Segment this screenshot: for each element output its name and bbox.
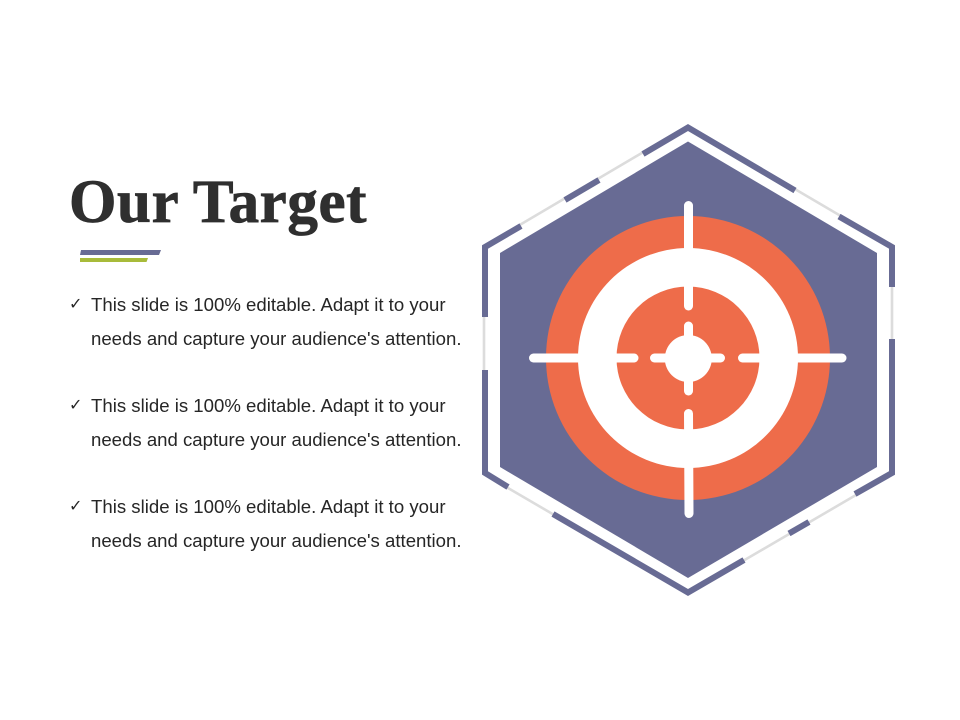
bullet one: needs and capture your audience's attention. bbox=[91, 328, 462, 349]
bullet two bbox=[69, 395, 462, 450]
hexagon fill bbox=[500, 142, 877, 578]
title: Our Target bbox=[69, 169, 367, 236]
bullet one: ✓ bbox=[69, 294, 82, 313]
bullet three: ✓ bbox=[69, 496, 82, 515]
bullet two: ✓ bbox=[69, 395, 82, 414]
bullet three: This slide is 100% editable. Adapt it to your bbox=[91, 496, 446, 517]
bullet three: needs and capture your audience's attention. bbox=[91, 530, 462, 551]
bullet one bbox=[69, 294, 462, 349]
target rings bbox=[546, 216, 830, 500]
bullet list bbox=[69, 294, 462, 551]
bullet one: This slide is 100% editable. Adapt it to your bbox=[91, 294, 446, 315]
crosshair bbox=[534, 206, 842, 514]
bullet three bbox=[69, 496, 462, 551]
hexagon dashed frame bbox=[484, 126, 892, 593]
bullet two: needs and capture your audience's attention. bbox=[91, 429, 462, 450]
bullet two: This slide is 100% editable. Adapt it to your bbox=[91, 395, 446, 416]
